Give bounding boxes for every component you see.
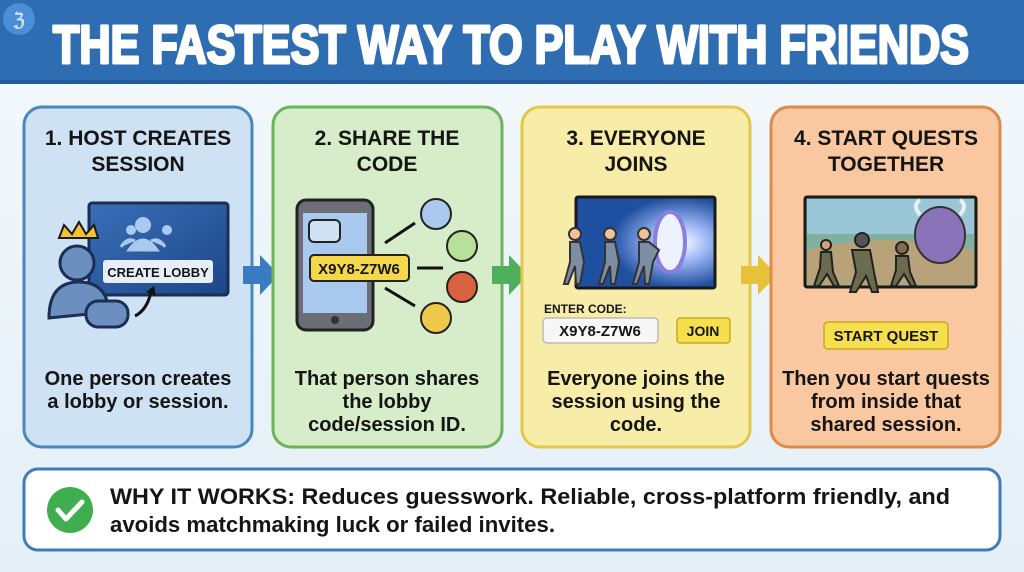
logo icon: [3, 3, 35, 35]
arrow 1: [243, 255, 279, 295]
heading 2: CODE: [357, 153, 417, 176]
callout text: WHY IT WORKS: Reduces guesswork. Reliable, cross-platform friendly, and: [110, 484, 950, 509]
icon: host with lobby screen: [49, 203, 228, 327]
text block 3: [547, 368, 725, 436]
heading 1: [45, 127, 231, 176]
heading 3: JOINS: [604, 153, 668, 176]
heading 4: 4. START QUESTS: [794, 127, 978, 150]
callout: why it works: [24, 469, 1000, 550]
icon: people walking into portal: [564, 197, 715, 288]
code input and join button: X9Y8-Z7W6: [559, 323, 641, 340]
heading 4: TOGETHER: [828, 153, 944, 176]
text block 4: from inside that: [811, 391, 961, 413]
header banner: [0, 0, 1024, 84]
text block 4: Then you start quests: [782, 368, 990, 390]
text block 2: That person shares: [295, 368, 479, 390]
logo icon: ℨ: [12, 10, 25, 30]
heading 3: [566, 127, 706, 176]
button: start quest: [824, 322, 948, 349]
panel: 3 everyone joins: [522, 107, 750, 447]
label: enter code: ENTER CODE:: [544, 302, 627, 316]
text block 1: One person creates: [45, 368, 231, 390]
text block 3: code.: [610, 414, 662, 436]
panel: 1 host creates session: [24, 107, 252, 447]
text block 4: shared session.: [810, 414, 962, 436]
text block 1: a lobby or session.: [47, 391, 229, 413]
heading 1: SESSION: [91, 153, 185, 176]
heading 3: 3. EVERYONE: [566, 127, 706, 150]
arrow 2: [492, 255, 528, 295]
heading 1: 1. HOST CREATES: [45, 127, 231, 150]
icon: phone with code and friends: [297, 199, 477, 333]
heading 4: [794, 127, 978, 176]
icon: check: [47, 487, 93, 533]
text block 2: [295, 368, 479, 436]
icon: game scene: [805, 197, 976, 292]
text block 3: session using the: [552, 391, 720, 413]
arrow 3: [741, 255, 777, 295]
code input and join button: [543, 318, 730, 343]
heading 2: 2. SHARE THE: [315, 127, 459, 150]
icon: host with lobby screen: CREATE LOBBY: [107, 265, 209, 280]
callout text: avoids matchmaking luck or failed invites.: [110, 512, 555, 537]
text block 3: Everyone joins the: [547, 368, 725, 390]
panel: 4 start quests together: [771, 107, 1000, 447]
callout text: [110, 484, 950, 537]
text block 1: [45, 368, 231, 413]
text block 2: code/session ID.: [308, 414, 466, 436]
text block 4: [782, 368, 990, 436]
text block 2: the lobby: [343, 391, 432, 413]
button: start quest: START QUEST: [834, 328, 938, 345]
code input and join button: JOIN: [687, 323, 719, 339]
icon: phone with code and friends: X9Y8-Z7W6: [318, 261, 400, 278]
heading 2: [315, 127, 459, 176]
panel: 2 share the code: [273, 107, 502, 447]
